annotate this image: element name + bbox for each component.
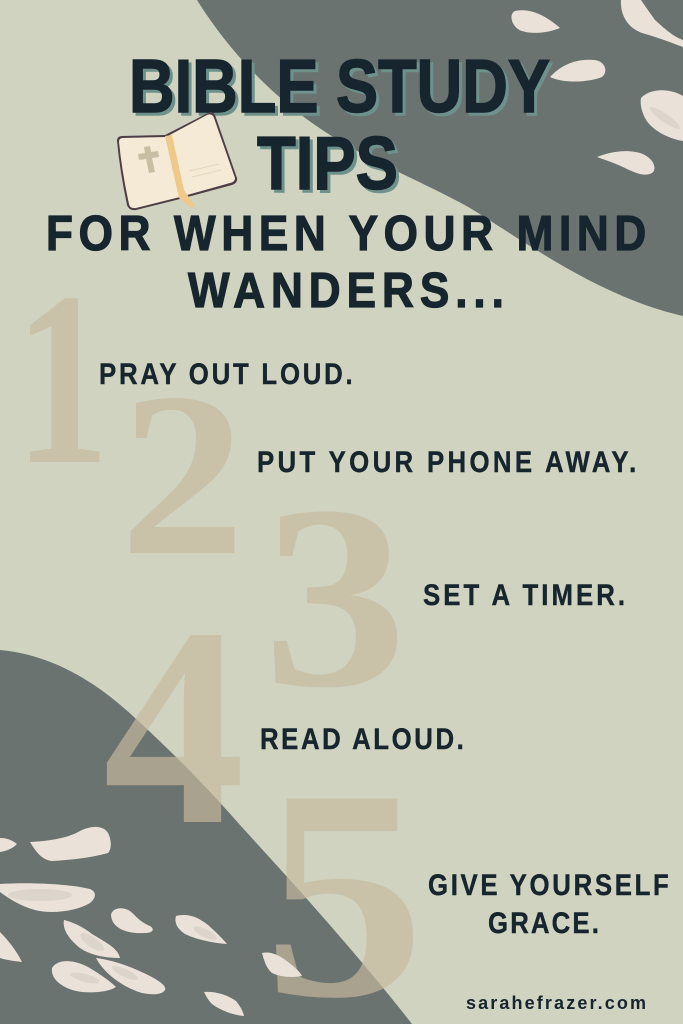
tip 5 (428, 868, 669, 939)
tip 5: GIVE YOURSELF (428, 868, 669, 901)
tip 4: READ ALOUD. (260, 722, 464, 755)
number 2: 2 (120, 345, 245, 604)
icon: open bible (117, 112, 237, 210)
number 4: 4 (103, 570, 245, 884)
top right petals (511, 0, 683, 175)
tip 2: PUT YOUR PHONE AWAY. (257, 445, 636, 478)
bottom left dark blob (0, 650, 412, 1024)
title (129, 44, 553, 208)
number 3: 3 (263, 452, 407, 742)
title: TIPS (257, 121, 398, 205)
top right dark blob (197, 0, 683, 316)
number 1: 1 (15, 241, 109, 516)
subtitle (46, 206, 646, 318)
title: BIBLE STUDY (129, 44, 550, 128)
tip 3: SET A TIMER. (423, 578, 625, 611)
subtitle: FOR WHEN YOUR MIND (46, 206, 646, 261)
title: BIBLE STUDY (132, 47, 553, 131)
website url: sarahefrazer.com (466, 993, 646, 1013)
tip 5: GRACE. (488, 906, 599, 939)
subtitle: WANDERS... (188, 263, 504, 318)
small petal over number 5 (262, 952, 302, 977)
title: TIPS (260, 124, 401, 208)
tip 1: PRAY OUT LOUD. (99, 357, 353, 390)
bottom left petals (0, 827, 244, 1016)
